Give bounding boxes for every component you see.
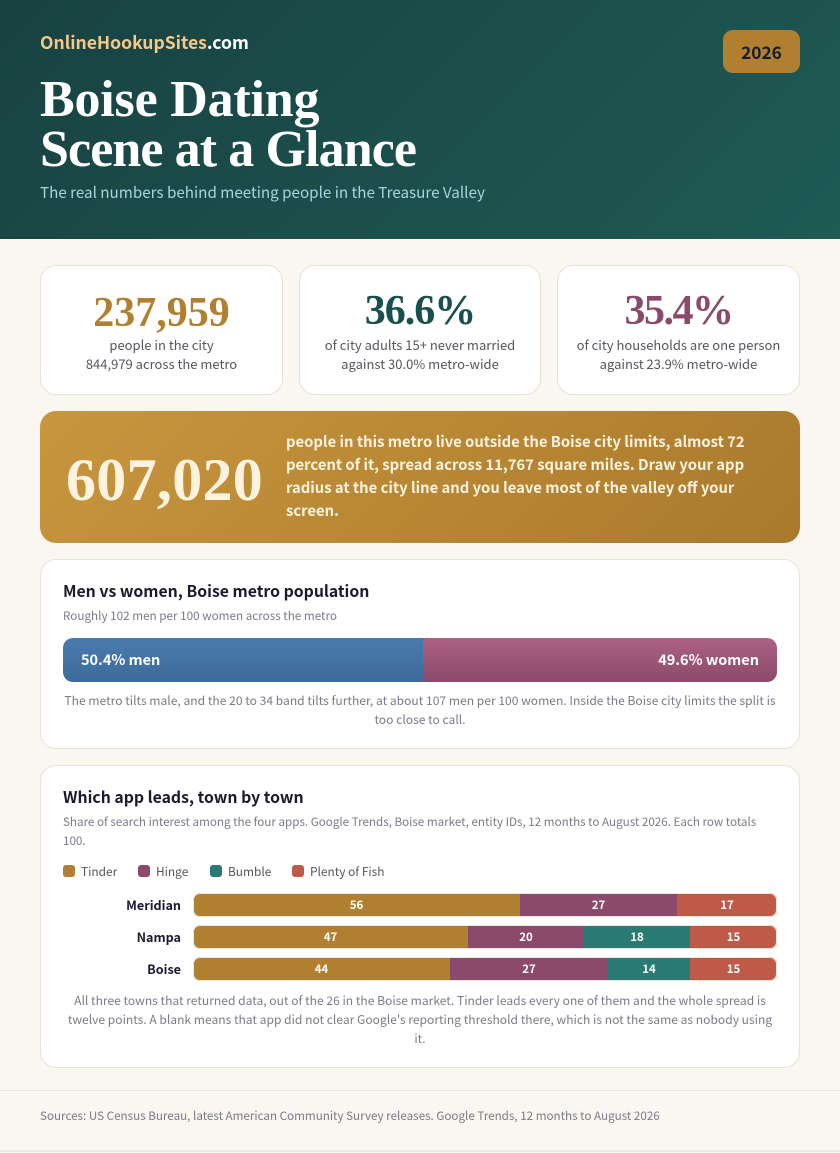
Hinge 27	[520, 893, 677, 917]
legend: Hinge	[138, 863, 188, 880]
panel note: twelve points. A blank means that app did not clear Google's reporting threshold there, which is not the same as nobody using	[68, 1011, 772, 1028]
stat caption	[325, 335, 515, 373]
women segment	[423, 638, 777, 682]
Plenty of Fish 17: 17	[720, 897, 734, 913]
sources: Sources: US Census Bureau, latest American Community Survey releases. Google Trends, 12 months to August 2026	[40, 1107, 660, 1124]
men segment: 50.4% men	[81, 649, 160, 670]
panel: app leaders	[40, 765, 800, 1068]
stat caption: of city adults 15+ never married	[325, 335, 515, 354]
panel note	[68, 992, 772, 1047]
Plenty of Fish 15: 15	[727, 929, 740, 945]
panel note: it.	[414, 1030, 426, 1047]
panel heading: Which app leads, town by town	[63, 785, 304, 808]
Hinge 27: 27	[522, 961, 536, 977]
stat caption	[577, 335, 780, 373]
legend: Bumble: Bumble	[228, 863, 271, 880]
stat caption: against 23.9% metro-wide	[600, 354, 757, 373]
callout text: screen.	[286, 500, 339, 521]
gender split bar	[63, 638, 777, 682]
year badge: 2026	[741, 39, 782, 64]
Plenty of Fish 15: 15	[727, 961, 740, 977]
title	[40, 71, 416, 178]
panel note: too close to call.	[374, 711, 466, 728]
Tinder 56: 56	[350, 897, 363, 913]
legend	[63, 863, 384, 880]
stat caption: people in the city	[109, 335, 214, 354]
footer	[0, 1090, 840, 1152]
callout text: people in this metro live outside the Boise city limits, almost 72	[286, 431, 745, 452]
stacked bar: Boise	[193, 957, 777, 981]
Tinder 56	[193, 893, 520, 917]
callout number: 607,020	[66, 447, 263, 513]
Tinder 47	[193, 925, 468, 949]
brand wordmark: OnlineHookupSites.com	[40, 30, 249, 55]
Hinge 27: 27	[592, 897, 605, 913]
Bumble 18	[584, 925, 690, 949]
stat caption	[86, 335, 237, 373]
panel: men vs women	[40, 559, 800, 749]
stat value: 237,959	[93, 290, 230, 336]
Tinder 44: 44	[315, 961, 328, 977]
stat caption: 844,979 across the metro	[86, 354, 237, 373]
title: Boise Dating	[40, 71, 319, 128]
Plenty of Fish 17	[677, 893, 777, 917]
callout text	[286, 431, 745, 521]
legend: Tinder: Tinder	[81, 863, 117, 880]
stat card: never married	[299, 265, 541, 395]
Hinge 20: 20	[519, 929, 533, 945]
panel heading: Men vs women, Boise metro population	[63, 579, 369, 602]
Tinder 47: 47	[324, 929, 337, 945]
Hinge 20	[468, 925, 584, 949]
Plenty of Fish 15	[690, 957, 777, 981]
panel subheading: Share of search interest among the four apps. Google Trends, Boise market, entity IDs, 12 months to August 2026. Each row totals	[63, 814, 756, 830]
stat card: city population	[40, 265, 283, 395]
panel subheading: Roughly 102 men per 100 women across the metro	[63, 607, 337, 624]
Tinder 44	[193, 957, 450, 981]
Bumble 14	[608, 957, 690, 981]
header band	[0, 0, 840, 239]
Plenty of Fish 15	[690, 925, 777, 949]
title: Scene at a Glance	[40, 121, 416, 178]
callout text: percent of it, spread across 11,767 square miles. Draw your app	[286, 454, 744, 475]
stat caption: of city households are one person	[577, 335, 780, 354]
legend: Plenty of Fish: Plenty of Fish	[310, 863, 384, 880]
row label: Meridian: Meridian	[126, 895, 181, 914]
stat caption: against 30.0% metro-wide	[341, 354, 499, 373]
panel note: All three towns that returned data, out of the 26 in the Boise market. Tinder leads every one of them and the whole spread is	[74, 992, 766, 1009]
legend: Tinder	[63, 863, 118, 880]
stat value: 36.6%	[365, 288, 475, 334]
stat card: one person households	[557, 265, 800, 395]
stacked bar: Nampa	[193, 925, 777, 949]
stacked bar: Meridian	[193, 893, 777, 917]
callout banner	[40, 411, 800, 543]
panel subheading	[63, 814, 756, 849]
panel subheading: 100.	[63, 833, 86, 849]
panel note: The metro tilts male, and the 20 to 34 band tilts further, at about 107 men per 100 women. Inside the Boise city limits the split is	[64, 692, 776, 709]
callout text: radius at the city line and you leave most of the valley off your	[286, 477, 734, 498]
subtitle: The real numbers behind meeting people in the Treasure Valley	[40, 181, 485, 203]
women segment: 49.6% women	[658, 649, 759, 670]
Bumble 18: 18	[630, 929, 644, 945]
panel note	[64, 692, 776, 728]
legend: Hinge: Hinge	[156, 863, 188, 880]
stat value: 35.4%	[624, 288, 732, 334]
row label: Nampa: Nampa	[137, 927, 181, 946]
Hinge 27	[450, 957, 608, 981]
year badge	[723, 30, 800, 73]
row label: Boise: Boise	[147, 959, 181, 978]
men segment	[63, 638, 423, 682]
Bumble 14: 14	[642, 961, 656, 977]
